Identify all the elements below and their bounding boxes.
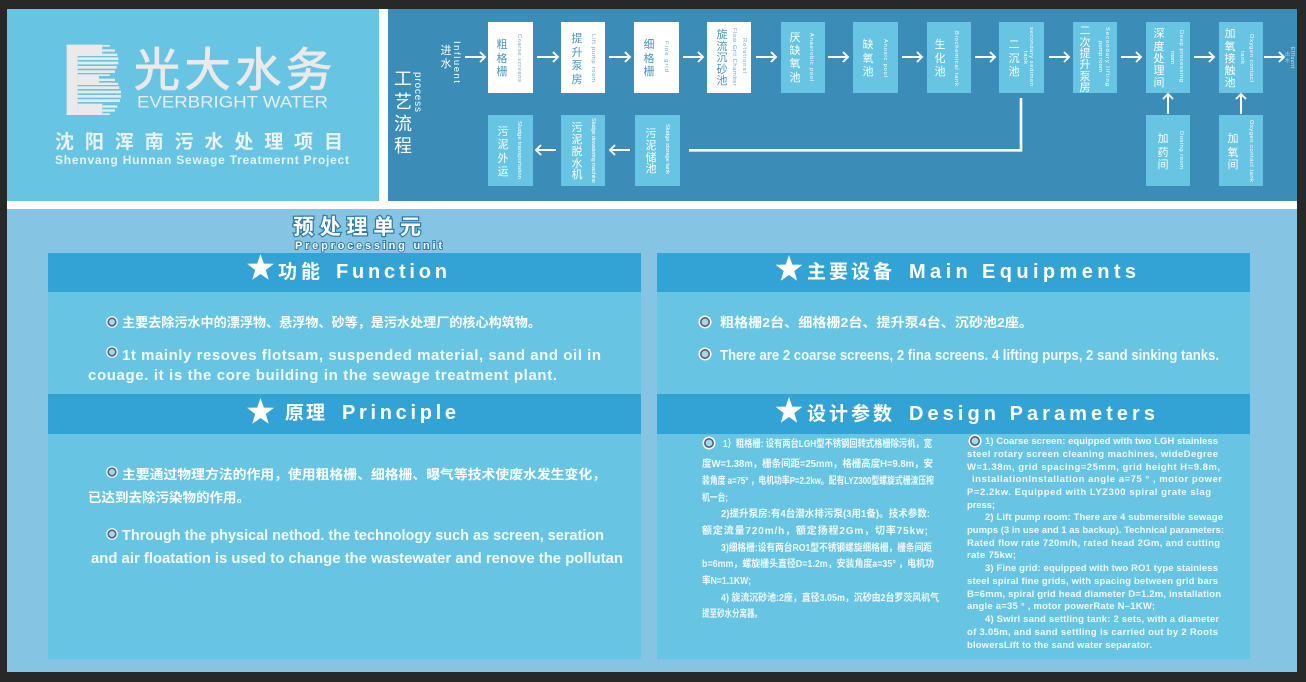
text: design parameters Chinese: 度W=1.38m，栅条间距=25mm，格栅高度H=9.8m，安 bbox=[702, 457, 933, 470]
box: secondary lifting pump room: pump room bbox=[1097, 41, 1103, 72]
box: secondary sedimentation tank: secondary sedimen bbox=[1028, 27, 1034, 86]
text: principle body bbox=[88, 466, 623, 567]
effluent label: 出水 bbox=[1285, 51, 1290, 64]
text: design parameters Chinese: 4) 旋流沉砂池:2座，直径3.05m，沉砂由2台罗茨风机气 bbox=[721, 591, 939, 604]
flow boxes bottom row bbox=[488, 115, 1263, 186]
box: dosing room: 加药间 bbox=[1158, 132, 1168, 171]
box: anoxic pool: Anoxic pool bbox=[882, 39, 888, 77]
text: design parameters English: Rated flow rate 720m/h, rated head 2Gm, and cutting bbox=[967, 538, 1220, 549]
text: main equipments body: There are 2 coarse screens, 2 fina screens. 4 lifting purps, 2 sand sinking tanks. bbox=[720, 347, 1219, 364]
text: design parameters English: blowersLift to the sand water separator. bbox=[967, 640, 1152, 651]
text: design parameters Chinese: 3)细格栅:设有两台RO1型不锈钢螺旋细格栅，栅条间距 bbox=[721, 541, 932, 554]
box: deep processing room bbox=[1146, 22, 1190, 93]
effluent label: Effluent bbox=[1289, 47, 1295, 69]
process flow heading: 艺 bbox=[394, 92, 412, 112]
box: anoxic pool: 缺氧池 bbox=[862, 37, 874, 78]
box: secondary sedimentation tank bbox=[999, 22, 1044, 93]
process flow heading: 工 bbox=[394, 69, 412, 89]
header: design parameters bbox=[657, 394, 1250, 434]
box: secondary lifting pump room: Secondary lifting bbox=[1104, 27, 1110, 86]
header: principle: 原理 bbox=[285, 403, 325, 424]
text: design parameters Chinese: b=6mm，螺旋栅头直径D=1.2m，安装角度a=35° ，电机功 bbox=[702, 557, 934, 570]
panel: function bbox=[48, 253, 641, 394]
box: anoxic pool bbox=[853, 22, 898, 93]
box: oxygen contact tank: tank bbox=[1239, 51, 1245, 64]
box: lift pump room: Lift pump room bbox=[590, 34, 596, 82]
header: design parameters: 设计参数 bbox=[807, 402, 892, 425]
text: function body bbox=[88, 315, 601, 384]
header: principle bbox=[48, 394, 641, 434]
box: sludge transportation: 污泥外运 bbox=[498, 125, 508, 178]
flow boxes top row bbox=[488, 22, 1263, 94]
text: design parameters Chinese: 装角度 a=75° ，电机功率P=2.2kw。配有LYZ300型螺旋式栅渣压榨 bbox=[702, 474, 934, 487]
box: dosing room: Dosing room bbox=[1178, 131, 1184, 169]
box: dosing room bbox=[1146, 115, 1190, 186]
heading: preprocessing unit: Preprocessing unit bbox=[295, 240, 442, 252]
header: function: 功能 bbox=[278, 261, 320, 283]
process flow heading: 流 bbox=[394, 114, 412, 134]
box: secondary lifting pump room bbox=[1073, 22, 1117, 94]
header: design parameters: Design Parameters bbox=[909, 403, 1155, 425]
box: oxygen contact tank: 加氧接触池 bbox=[1224, 27, 1236, 89]
influent label: Influent bbox=[451, 41, 462, 83]
box: biochemical tank: 生化池 bbox=[934, 37, 946, 78]
text: main equipments body bbox=[698, 315, 1219, 364]
text: design parameters Chinese: 2)提升泵房:有4台潜水排污泵(3用1备)。技术参数: bbox=[721, 507, 930, 520]
text: design parameters English: 4) Swirl sand settling tank: 2 sets, with a diameter bbox=[985, 614, 1219, 625]
text: design parameters English: W=1.38m, grid spacing=25mm, grid height H=9.8m, bbox=[967, 462, 1220, 473]
influent label bbox=[440, 41, 462, 83]
box: secondary sedimentation tank: 二沉池 bbox=[1008, 39, 1020, 78]
box: rotational flow grit chamber: 旋流沉砂池 bbox=[716, 27, 728, 87]
text: main equipments body: 粗格栅2台、细格栅2台、提升泵4台、沉砂池2座。 bbox=[720, 315, 1033, 330]
text: design parameters English: angle a=35 ° , motor powerRate N–1KW; bbox=[967, 601, 1155, 612]
process flow heading: 程 bbox=[394, 136, 412, 156]
text: design parameters English bbox=[967, 434, 1224, 651]
box: deep processing room: 深度处理间 bbox=[1154, 27, 1164, 89]
text: principle body: Through the physical nethod. the technology such as screen, seration bbox=[122, 527, 604, 544]
influent label: 进水 bbox=[440, 44, 452, 70]
text: principle body: 已达到去除污染物的作用。 bbox=[88, 490, 250, 505]
header: function: Function bbox=[336, 261, 447, 283]
logo English name: EVERBRIGHT WATER bbox=[137, 92, 328, 112]
box: fine grid bbox=[634, 22, 679, 93]
box: secondary sedimentation tank: tank bbox=[1022, 51, 1028, 64]
panel: design parameters bbox=[657, 394, 1250, 659]
box: sludge storage tank bbox=[635, 115, 680, 186]
heading: preprocessing unit: 预处理单元 bbox=[293, 216, 421, 239]
box: lift pump room: 提升泵房 bbox=[572, 32, 582, 86]
text: design parameters English: steel rotary screen cleaning machines, wideDegree bbox=[967, 449, 1218, 460]
panel: logo and project title bbox=[7, 9, 379, 201]
box: biochemical tank bbox=[927, 22, 971, 93]
box: fine grid: Fine grid bbox=[663, 41, 669, 72]
box: sludge storage tank: 污泥储池 bbox=[646, 127, 656, 175]
box: oxygen contact tank: Oxygen contact bbox=[1248, 34, 1254, 82]
panel: principle bbox=[48, 394, 641, 659]
box: secondary lifting pump room: 二次提升泵房 bbox=[1080, 25, 1090, 94]
box: deep processing room: Deep processing bbox=[1178, 30, 1184, 82]
header: principle: Principle bbox=[342, 402, 456, 424]
box: sludge storage tank: Sludge storage tank bbox=[664, 124, 670, 174]
box: biochemical tank: Biochemical tank bbox=[953, 31, 959, 86]
box: oxygen room: Oxygen contact tank bbox=[1248, 120, 1254, 182]
box: anaerobic pool: 厌缺氧池 bbox=[790, 32, 800, 84]
project title Chinese: 沈阳浑南污水处理项目 bbox=[55, 131, 343, 153]
text: design parameters Chinese: 额定流量720m/h，额定扬程2Gm，切率75kw; bbox=[702, 524, 928, 537]
text: design parameters English: installationInstallation angle a=75 ° , motor power bbox=[972, 474, 1222, 485]
text: design parameters English: press; bbox=[967, 500, 995, 511]
box: rotational flow grit chamber bbox=[707, 22, 751, 93]
heading: preprocessing unit bbox=[293, 216, 442, 252]
text: principle body: 主要通过物理方法的作用，使用粗格栅、细格栅、曝气等技术使废水发生变化， bbox=[122, 467, 606, 482]
arrows bbox=[465, 52, 1284, 155]
text: design parameters English: B=6mm, spiral grid head diameter D=1.2m, installation bbox=[967, 589, 1221, 600]
process flow heading bbox=[394, 69, 423, 156]
header: main equipments: 主要设备 bbox=[807, 261, 892, 283]
logo wordmark: 光大水务 bbox=[134, 44, 332, 96]
header: main equipments bbox=[657, 253, 1250, 292]
box: sludge dewatering machine bbox=[561, 115, 605, 186]
text: design parameters English: steel spiral fine grids, with spacing between grid bars bbox=[967, 576, 1218, 587]
box: anaerobic pool: Anaerobic pool bbox=[808, 33, 814, 81]
text: design parameters English: P=2.2kw. Equipped with LYZ300 spiral grate slag bbox=[967, 487, 1211, 498]
panel: process flow bbox=[388, 9, 1297, 201]
box: sludge dewatering machine: 污泥脱水机 bbox=[572, 121, 582, 181]
box: anaerobic pool bbox=[781, 22, 825, 93]
text: function body: couage. it is the core building in the sewage treatment plant. bbox=[88, 367, 557, 384]
box: rotational flow grit chamber: Flow Grit Chamber bbox=[731, 28, 737, 86]
panel: main equipments bbox=[657, 253, 1250, 394]
header: function bbox=[48, 253, 641, 292]
box: lift pump room bbox=[561, 22, 605, 93]
box: deep processing room: room bbox=[1169, 51, 1175, 64]
text: principle body: and air floatation is used to change the wastewater and renove the pollutan bbox=[91, 550, 623, 567]
text: design parameters Chinese: 机一台; bbox=[702, 491, 728, 504]
text: design parameters English: 1) Coarse screen: equipped with two LGH stainless bbox=[985, 436, 1218, 447]
text: design parameters English: rate 75kw; bbox=[967, 550, 1016, 561]
box: coarse screens: 粗格栅 bbox=[496, 38, 508, 78]
box: sludge dewatering machine: Sludge dewatering machine bbox=[590, 118, 596, 183]
box: oxygen room: 加氧间 bbox=[1228, 132, 1238, 171]
box: fine grid: 细格栅 bbox=[644, 38, 654, 78]
panel: preprocessing unit bbox=[7, 209, 1297, 672]
text: function body: 1t mainly resoves flotsam, suspended material, sand and oil in bbox=[122, 347, 601, 364]
text: design parameters Chinese bbox=[702, 436, 939, 620]
box: rotational flow grit chamber: Rotational bbox=[741, 38, 747, 73]
process flow heading: process bbox=[412, 72, 423, 112]
text: design parameters English: 2) Lift pump room: There are 4 submersible sewage bbox=[985, 512, 1223, 523]
text: function body: 主要去除污水中的漂浮物、悬浮物、砂等，是污水处理厂的核心构筑物。 bbox=[122, 315, 541, 330]
text: design parameters Chinese: 率N=1.1KW; bbox=[702, 574, 751, 587]
header: main equipments: Main Equipments bbox=[909, 261, 1136, 283]
box: oxygen contact tank bbox=[1219, 22, 1263, 93]
text: design parameters English: 3) Fine grid: equipped with two RO1 type stainless bbox=[985, 563, 1218, 574]
text: design parameters English: pumps (3 in use and 1 as backup). Technical parameters: bbox=[967, 525, 1224, 536]
box: oxygen room bbox=[1219, 115, 1263, 186]
project title English: Shenvang Hunnan Sewage Treatmernt Project bbox=[55, 153, 349, 167]
effluent label bbox=[1285, 47, 1295, 69]
box: coarse screens bbox=[488, 22, 533, 93]
return line from secondary tank to sludge storage bbox=[689, 98, 1021, 150]
icon: Everbright B logo bbox=[67, 45, 121, 115]
text: design parameters Chinese: 1）粗格栅: 设有两台LGH型不锈钢回转式格栅除污机，宽 bbox=[723, 437, 932, 450]
box: coarse screens: Coarse screens bbox=[516, 34, 522, 82]
text: design parameters English: of 3.05m, and sand settling is carried out by 2 Roots bbox=[967, 627, 1218, 638]
text: design parameters Chinese: 提至砂水分离器。 bbox=[702, 607, 762, 620]
box: sludge transportation: Sludge transportation bbox=[516, 121, 522, 179]
box: sludge transportation bbox=[488, 115, 533, 186]
